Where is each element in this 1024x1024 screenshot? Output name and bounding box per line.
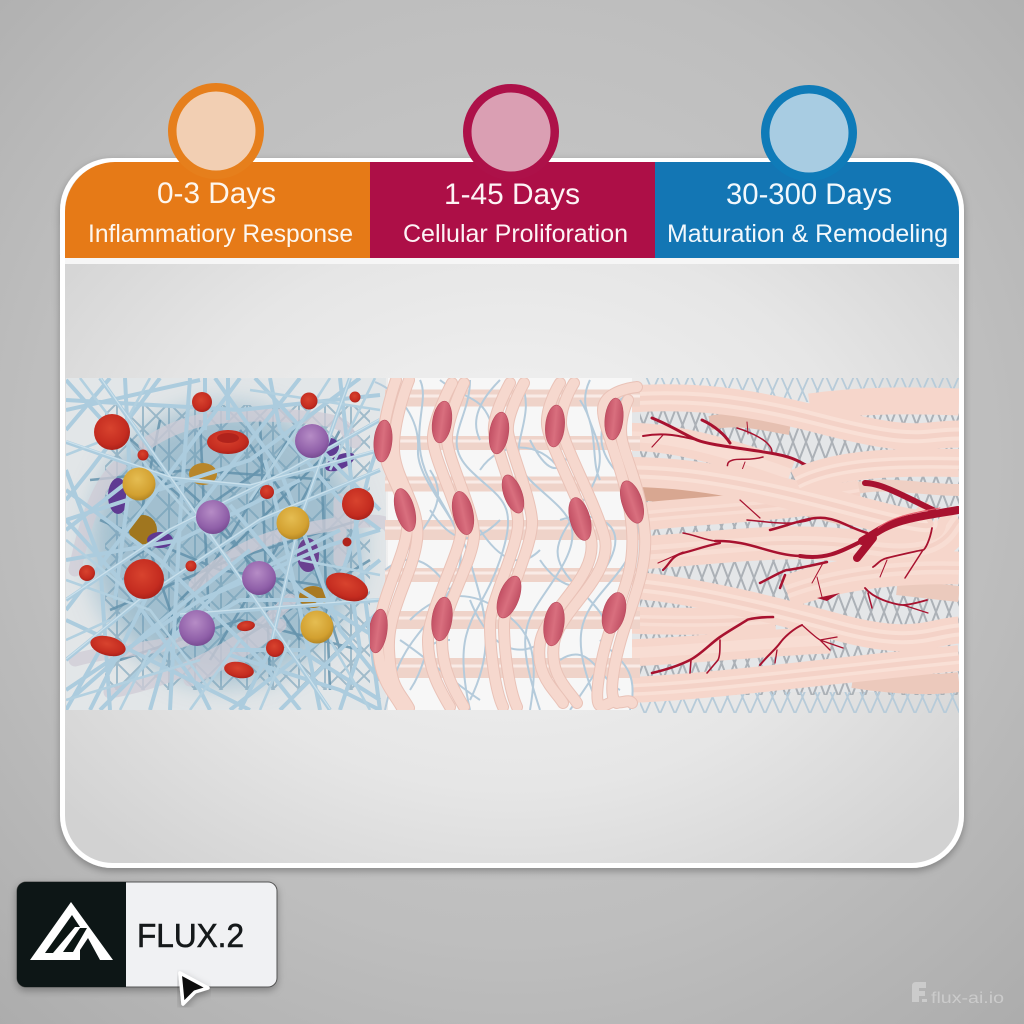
icon: cursor	[180, 973, 208, 1004]
fibres: horizontal pink bands	[385, 398, 640, 668]
fibres: upper collagen bundles	[628, 398, 959, 690]
icon: crimson circle	[463, 84, 559, 180]
cells: red blood cells	[79, 392, 374, 680]
illustration: inflammatory fibrin mesh and cells	[66, 377, 395, 710]
cells: purple leukocytes	[179, 424, 329, 646]
header: three phase bands	[65, 162, 959, 258]
heading: phase 2: 1-45 Days	[444, 178, 580, 211]
vessels: lower-layer red branches	[643, 418, 813, 470]
logo text: FLUX.2	[137, 917, 244, 954]
heading: phase 3: Maturation & Remodeling	[667, 220, 948, 248]
illustration: cellular proliferation tissue	[366, 378, 648, 710]
icon: orange circle	[168, 83, 264, 179]
fibres: shaded back bundles	[635, 420, 959, 684]
cells: yellow macrophages	[122, 468, 334, 644]
heading: phase 1	[88, 177, 353, 248]
panel: main card	[62, 83, 962, 866]
logo badge: FLUX.2	[17, 882, 277, 987]
heading: phase 1: 0-3 Days	[157, 177, 276, 210]
mesh: thin blue-grey strands	[375, 380, 640, 710]
mesh: grey and blue lattice behind bundles	[628, 378, 959, 713]
icon: blue circle	[761, 85, 857, 181]
heading: phase 3	[667, 178, 948, 248]
fibres: collagen bundle group	[628, 401, 959, 653]
tubes: wavy pink myofibroblasts	[378, 380, 645, 708]
heading: phase 1: Inflammatiory Response	[88, 220, 353, 248]
vessel: cut end	[817, 593, 840, 601]
watermark: flux-ai.io: flux-ai.io	[931, 990, 1004, 1007]
mesh: light blue fibrin strands	[66, 378, 380, 710]
heading: phase 2: Cellular Proliforation	[403, 220, 628, 248]
cells: partly hidden yellow and purple	[108, 438, 357, 608]
cells: red myofibroblast bodies	[366, 397, 648, 654]
heading: phase 3: 30-300 Days	[726, 178, 892, 211]
watermark: flux-ai.io	[912, 982, 1004, 1007]
icon: mountain logo mark	[30, 902, 113, 960]
vessels: main red vascular tree	[652, 483, 958, 673]
fibres: grey-pink collagen	[75, 415, 395, 692]
heading: phase 2	[403, 178, 628, 248]
illustration: mature collagen bundles and blood vessels	[628, 378, 959, 713]
